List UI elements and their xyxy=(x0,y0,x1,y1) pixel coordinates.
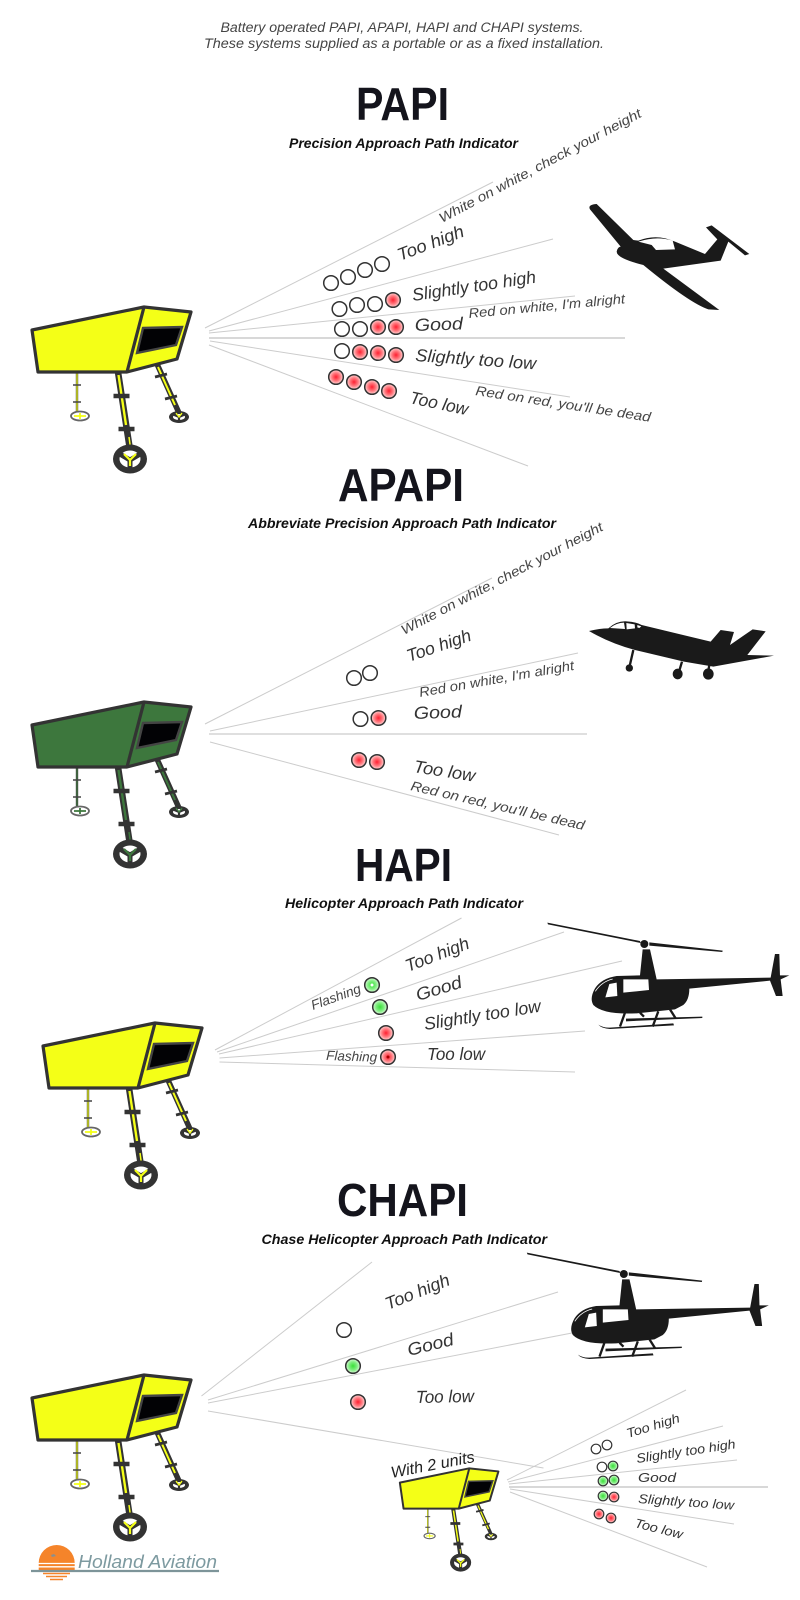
lights: too high xyxy=(324,257,389,290)
icon: small unit xyxy=(400,1468,498,1572)
label: red on red: Red on red, you'll be dead xyxy=(409,778,587,833)
light: green xyxy=(373,1000,387,1014)
panel: CHAPI xyxy=(32,1174,769,1572)
logo: Holland Aviation: Holland Aviation xyxy=(78,1552,217,1572)
icon: helicopter silhouette xyxy=(547,923,789,1029)
icon: APAPI unit xyxy=(32,702,191,868)
subheading: CHAPI: Chase Helicopter Approach Path Indicator xyxy=(262,1232,548,1247)
panel: APAPI xyxy=(32,459,774,868)
label: good: Good xyxy=(638,1470,677,1485)
label: slightly too high: Slightly too high xyxy=(411,267,537,305)
light: red xyxy=(379,1026,393,1040)
light beams: PAPI xyxy=(205,182,625,466)
lights: slightly too high xyxy=(332,293,400,316)
label: white on white: White on white, check your height xyxy=(436,105,645,226)
icon: HAPI unit xyxy=(43,1023,202,1190)
label: white on white: White on white, check your height xyxy=(398,519,607,638)
icon: helicopter silhouette xyxy=(527,1253,769,1359)
label: too high: Too high xyxy=(402,933,472,976)
lights: slightly too high xyxy=(597,1461,618,1472)
subheading: PAPI: Precision Approach Path Indicator xyxy=(289,136,519,151)
heading: PAPI: PAPI xyxy=(356,78,449,130)
lights: too low xyxy=(352,753,384,769)
light: flashing green xyxy=(365,978,379,992)
label: too low: Too low xyxy=(408,387,471,419)
icon: PAPI unit xyxy=(32,307,191,474)
panel: PAPI xyxy=(32,78,749,474)
label: too high: Too high xyxy=(394,221,467,265)
icon: fighter jet silhouette xyxy=(589,621,774,680)
label: red on white: Red on white, I'm alright xyxy=(418,658,576,700)
lights: slightly too low xyxy=(598,1491,619,1502)
light beams: APAPI xyxy=(205,578,587,835)
label: flashing upper: Flashing xyxy=(309,981,363,1013)
label: red on red: Red on red, you'll be dead xyxy=(475,383,652,425)
label: good: Good xyxy=(405,1329,457,1360)
lights: good xyxy=(598,1475,619,1486)
logo: Holland Aviation xyxy=(31,1545,219,1580)
intro text: These systems supplied as a portable or as a fixed installation. xyxy=(204,36,604,51)
label: red on white: Red on white, I'm alright xyxy=(468,291,627,321)
lights: slightly too low xyxy=(335,344,403,362)
label: good: Good xyxy=(413,972,465,1005)
icon: light aircraft silhouette xyxy=(589,204,749,310)
panel: HAPI xyxy=(43,839,789,1190)
subheading: APAPI: Abbreviate Precision Approach Path Indicator xyxy=(247,516,557,531)
intro text xyxy=(204,20,604,51)
light: green xyxy=(346,1359,360,1373)
heading: APAPI: APAPI xyxy=(338,459,464,511)
label: too low: Too low xyxy=(633,1515,686,1542)
light: red xyxy=(351,1395,365,1409)
label: too high: Too high xyxy=(624,1410,681,1441)
light beams: HAPI xyxy=(215,918,622,1072)
heading: HAPI: HAPI xyxy=(355,839,452,891)
label: good: Good xyxy=(414,313,465,335)
lights: too high xyxy=(347,666,377,685)
lights: too low xyxy=(329,370,396,398)
label: slightly too low: Slightly too low xyxy=(415,345,538,374)
label: slightly too high: Slightly too high xyxy=(635,1436,736,1466)
label: with 2 units: With 2 units xyxy=(390,1449,476,1482)
light: white xyxy=(337,1323,351,1337)
label: too low: Too low xyxy=(416,1386,475,1407)
sub-panel: with 2 units xyxy=(390,1390,768,1572)
label: slightly too low: Slightly too low xyxy=(422,996,544,1034)
label: too high: Too high xyxy=(404,625,474,666)
lights: too high xyxy=(591,1440,612,1454)
lights: good xyxy=(353,711,386,726)
light beams: CHAPI xyxy=(202,1262,572,1468)
label: too low: Too low xyxy=(427,1044,486,1064)
icon: CHAPI unit xyxy=(32,1375,191,1542)
label: too high: Too high xyxy=(382,1270,453,1314)
label: good: Good xyxy=(413,701,464,723)
light: flashing red xyxy=(381,1050,395,1064)
lights: good xyxy=(335,320,403,336)
lights: too low xyxy=(594,1509,616,1523)
label: too low: Too low xyxy=(412,756,478,786)
light beams: 2 units xyxy=(507,1390,768,1567)
label: slightly too low: Slightly too low xyxy=(638,1491,736,1513)
subheading: HAPI: Helicopter Approach Path Indicator xyxy=(285,896,524,911)
label: flashing lower: Flashing xyxy=(326,1048,378,1065)
intro text: Battery operated PAPI, APAPI, HAPI and CHAPI systems. xyxy=(220,20,584,35)
heading: CHAPI: CHAPI xyxy=(337,1174,468,1226)
